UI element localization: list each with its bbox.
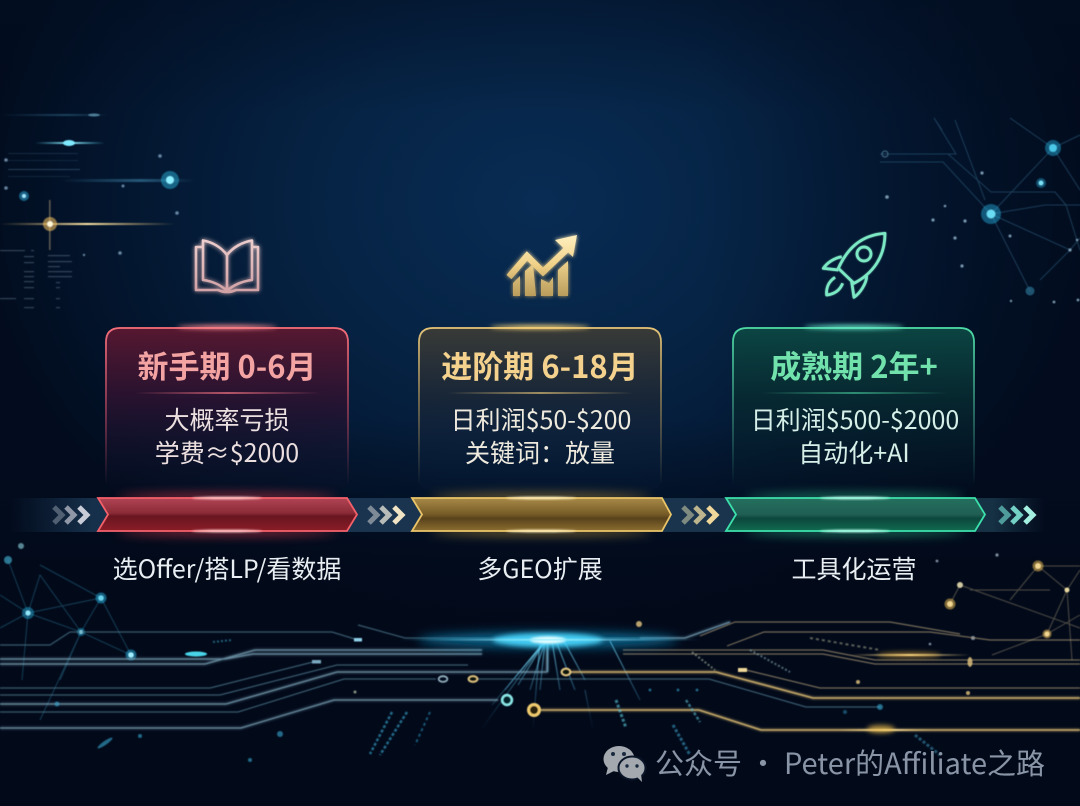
icon: rocket [823,233,885,297]
progress band [10,498,1045,532]
panel: stage 2 advanced [412,235,671,586]
arrow bar: stage 2 [412,493,671,536]
chevrons: before stage 1 [54,507,87,523]
panel: stage 1 beginner [98,240,357,586]
circuit board traces [0,621,1080,762]
text: stage 1 tuition: 学费≈$2000 [155,434,299,470]
panel: stage 3 mature [726,233,985,586]
card: stage 1 [105,325,349,492]
text: account name: 公众号 · Peter的Affiliate之路 [655,741,1045,783]
heading: stage 1: 新手期 0-6月 [137,342,317,387]
arrow bar: stage 3 [726,493,985,536]
lower-right gold network nodes [929,553,1080,660]
chevrons: stage 2 to stage 3 [683,507,716,523]
upper-left light flares and data readout [0,114,195,308]
upper-right network nodes [880,118,1080,303]
arrow bar: stage 1 [98,493,357,536]
text: stage 3 tools: 自动化+AI [798,434,910,470]
heading: stage 3: 成熟期 2年+ [770,342,938,387]
caption: stage 2: 多GEO扩展 [477,550,603,586]
icon: wechat [604,746,646,782]
card: stage 3 [732,325,975,492]
icon: open book [196,240,258,292]
text: stage 2 keyword: 关键词：放量 [465,434,615,470]
text: stage 1 outcome: 大概率亏损 [164,401,290,437]
watermark [604,741,1045,783]
icon: rising chart [509,235,577,296]
card: stage 2 [418,325,662,492]
chevrons: after stage 3 [1000,507,1033,523]
chevrons: stage 1 to stage 2 [369,507,402,523]
text: stage 2 profit: 日利润$50-$200 [451,401,631,437]
caption: stage 3: 工具化运营 [791,550,917,586]
text: stage 3 profit: 日利润$500-$2000 [751,401,959,437]
caption: stage 1: 选Offer/搭LP/看数据 [113,550,341,586]
heading: stage 2: 进阶期 6-18月 [441,342,639,387]
lower-left network nodes [0,543,136,720]
